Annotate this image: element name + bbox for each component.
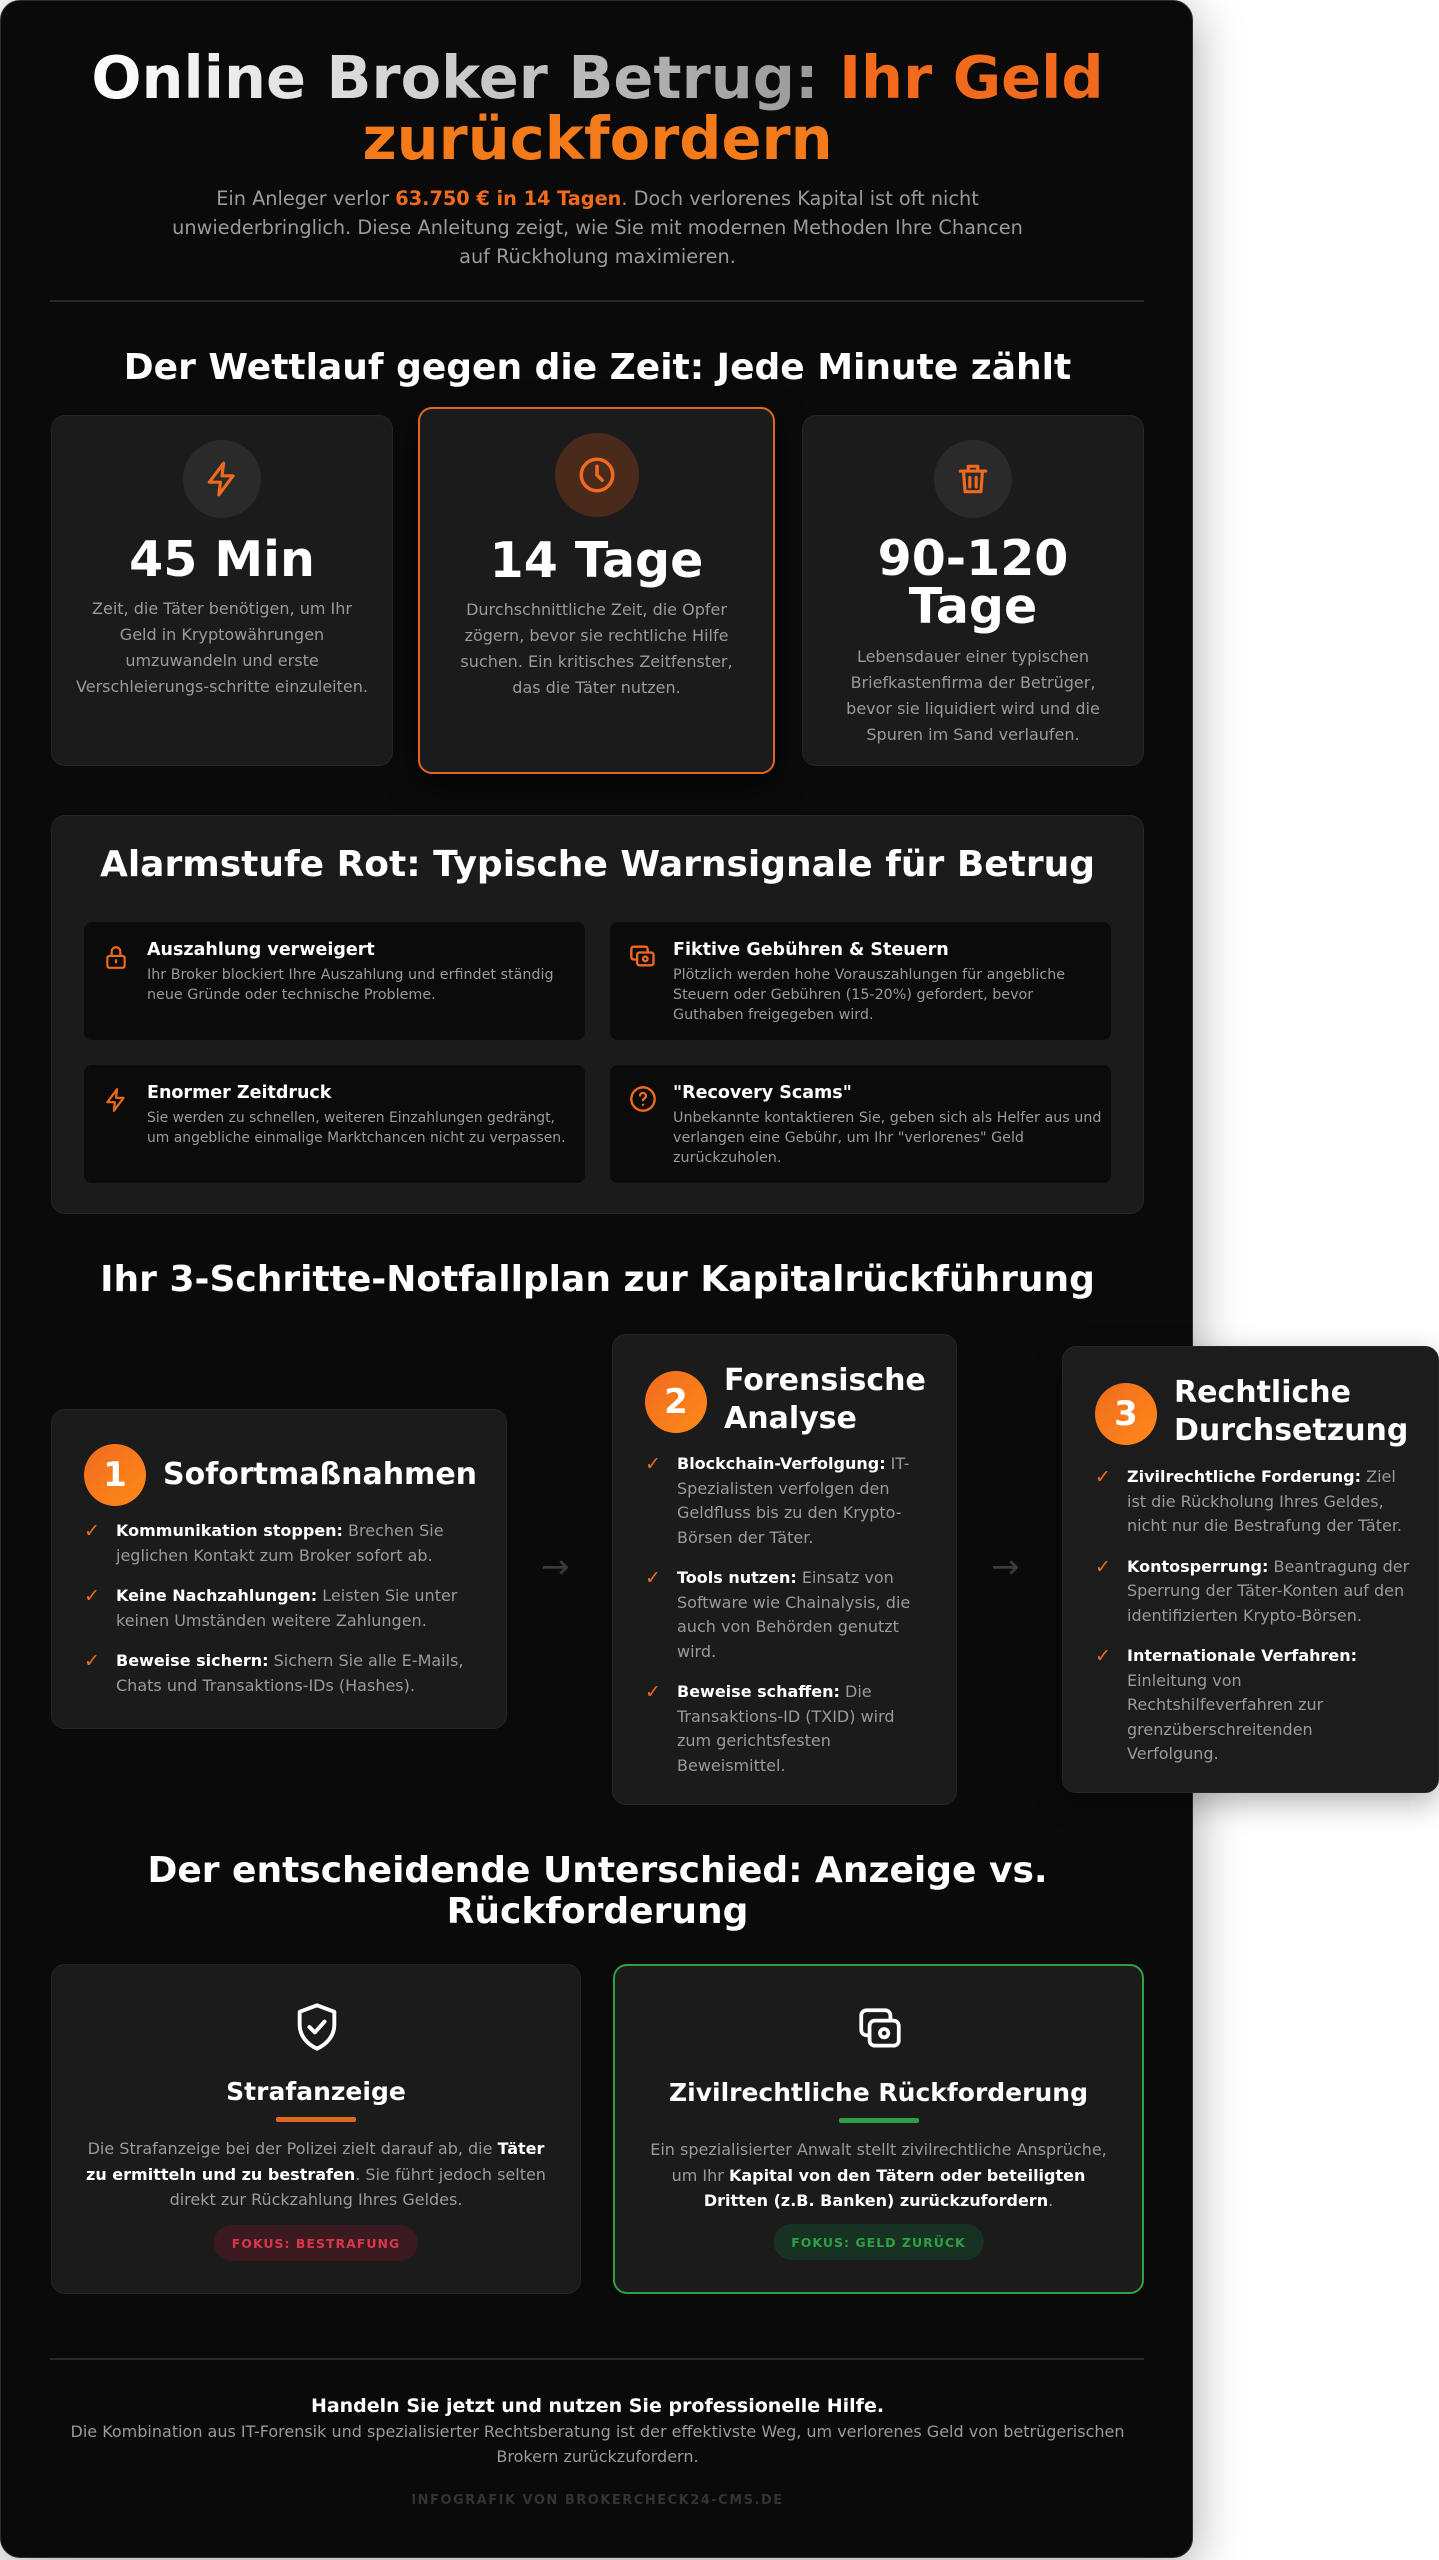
step 3 card: Internationale Verfahren: Einleitung von Rechtshilfeverfahren zur grenzüberschreitenden Verfolgung. <box>1127 1646 1357 1763</box>
heading: 3-step plan: Ihr 3-Schritte-Notfallplan zur Kapitalrückführung <box>100 1259 1095 1300</box>
footer credit: INFOGRAFIK VON BROKERCHECK24-CMS.DE <box>411 2493 784 2508</box>
warning: recovery scams: Unbekannte kontaktieren Sie, geben sich als Helfer aus und verlangen eine Gebühr, um Ihr "verlorenes" Geld zurückzuholen. <box>673 1110 1102 1166</box>
warning: payout refused: Auszahlung verweigert <box>147 940 375 960</box>
step 2 card: Blockchain-Verfolgung: IT-Spezialisten verfolgen den Geldfluss bis zu den Krypto-Börsen der Täter. <box>677 1454 909 1546</box>
step 1 card: Sofortmaßnahmen <box>163 1457 477 1492</box>
step 2 card: Analyse <box>724 1401 857 1436</box>
stat card: 90-120 Tage <box>802 415 1144 766</box>
heading: race against time: Der Wettlauf gegen die Zeit: Jede Minute zählt <box>124 347 1071 388</box>
stat card: 14 Tage (highlight) <box>418 407 775 774</box>
subtitle: Ein Anleger verlor 63.750 € in 14 Tagen. Doch verlorenes Kapital ist oft nicht unwiederbringlich. Diese Anleitung zeigt, wie Sie mit modernen Methoden Ihre Chancen auf Rückholung maximieren. <box>172 187 1023 268</box>
compare card: Rückforderung <box>613 1964 1144 2294</box>
step 1 card: Beweise sichern: Sichern Sie alle E-Mails, Chats und Transaktions-IDs (Hashes). <box>116 1651 463 1694</box>
warning: fees <box>610 922 1111 1040</box>
stat card: 90-120 Tage: Lebensdauer einer typischen Briefkastenfirma der Betrüger, bevor sie liquidiert wird und die Spuren im Sand verlaufen. <box>846 647 1100 744</box>
title: Online Broker Betrug: Ihr Geld <box>91 43 1104 112</box>
warning: recovery scams <box>610 1065 1111 1183</box>
warning: time pressure: Sie werden zu schnellen, weiteren Einzahlungen gedrängt, um angebliche einmalige Marktchancen nicht zu verpassen. <box>147 1110 566 1146</box>
panel: warning signals <box>51 815 1144 1214</box>
icon: trash <box>934 440 1012 518</box>
title: zurückfordern <box>362 104 833 173</box>
warning: payout refused <box>84 922 585 1040</box>
arrow 2: → <box>991 1547 1020 1587</box>
step 2 card: 2 <box>664 1382 688 1422</box>
stat card: 45 Min: 45 Min <box>129 531 315 588</box>
compare card: Strafanzeige <box>51 1964 581 2294</box>
step 1 card <box>51 1409 507 1729</box>
warning: time pressure: Enormer Zeitdruck <box>147 1083 331 1103</box>
warning: payout refused: Ihr Broker blockiert Ihre Auszahlung und erfindet ständig neue Gründe oder technische Probleme. <box>147 967 554 1003</box>
step 3 card: Rechtliche <box>1174 1375 1351 1410</box>
step 1 card: 1 <box>103 1455 127 1495</box>
step 3 card: Durchsetzung <box>1174 1413 1408 1448</box>
compare card: Strafanzeige: Die Strafanzeige bei der Polizei zielt darauf ab, die Täter zu ermitteln und zu bestrafen. Sie führt jedoch selten direkt zur Rückzahlung Ihres Geldes. <box>86 2139 546 2209</box>
step 3 card: Zivilrechtliche Forderung: Ziel ist die Rückholung Ihres Geldes, nicht nur die Bestrafung der Täter. <box>1127 1467 1402 1535</box>
step 1 card: Keine Nachzahlungen: Leisten Sie unter keinen Umständen weitere Zahlungen. <box>116 1586 457 1630</box>
step 1 card: Kommunikation stoppen: Brechen Sie jeglichen Kontakt zum Broker sofort ab. <box>116 1521 444 1564</box>
compare card: Rückforderung: Zivilrechtliche Rückforderung <box>669 2078 1088 2107</box>
arrow 1: → <box>541 1547 570 1587</box>
title <box>91 43 1104 173</box>
stat card: 14 Tage (highlight): Durchschnittliche Zeit, die Opfer zögern, bevor sie rechtliche Hilfe suchen. Ein kritisches Zeitfenster, das die Täter nutzen. <box>460 600 733 697</box>
footer text: Die Kombination aus IT-Forensik und spezialisierter Rechtsberatung ist der effektivste Weg, um verlorenes Geld von betrügerischen Brokern zurückzufordern. <box>70 2422 1124 2466</box>
stat card: 90-120 Tage: Tage <box>909 578 1037 635</box>
warning: recovery scams: "Recovery Scams" <box>673 1083 852 1103</box>
stat card: 45 Min: Zeit, die Täter benötigen, um Ihr Geld in Kryptowährungen umzuwandeln und erste Verschleierungs-schritte einzuleiten. <box>76 599 368 696</box>
footer text <box>70 2395 1124 2466</box>
footer text: Handeln Sie jetzt und nutzen Sie professionelle Hilfe. <box>311 2395 884 2417</box>
compare card: Strafanzeige: FOKUS: BESTRAFUNG <box>232 2236 400 2250</box>
warning: fees: Plötzlich werden hohe Vorauszahlungen für angebliche Steuern oder Gebühren (15-20%) gefordert, bevor Guthaben freigegeben wird. <box>673 967 1065 1023</box>
step 3 card: Kontosperrung: Beantragung der Sperrung der Täter-Konten auf den identifizierten Krypto-Börsen. <box>1127 1556 1409 1624</box>
step 2 card: Forensische <box>724 1363 926 1398</box>
stat card: 45 Min <box>51 415 393 766</box>
stat card: 90-120 Tage: 90-120 <box>878 530 1068 587</box>
icon: lightning <box>183 440 261 518</box>
icon: shield <box>298 2003 336 2051</box>
heading: Alarmstufe Rot: Typische Warnsignale für Betrug <box>100 844 1095 885</box>
compare card: Strafanzeige: Strafanzeige <box>226 2077 406 2106</box>
step 2 card: Beweise schaffen: Die Transaktions-ID (TXID) wird zum gerichtsfesten Beweismittel. <box>677 1682 895 1774</box>
compare card: Rückforderung: Ein spezialisierter Anwalt stellt zivilrechtliche Ansprüche, um Ihr Kapital von den Tätern oder beteiligten Dritten (z.B. Banken) zurückzufordern. <box>650 2140 1107 2210</box>
icon: money <box>859 2008 901 2048</box>
icon: clock <box>554 433 638 517</box>
heading: difference: Der entscheidende Unterschied: Anzeige vs. Rückforderung <box>147 1850 1048 1932</box>
step 3 card <box>1062 1346 1439 1793</box>
step 2 card: Tools nutzen: Einsatz von Software wie Chainalysis, die auch von Behörden genutzt wird. <box>677 1568 910 1660</box>
step 3 card: 3 <box>1114 1394 1138 1434</box>
step 2 card <box>612 1334 957 1805</box>
warning: fees: Fiktive Gebühren & Steuern <box>673 940 949 960</box>
stat card: 14 Tage (highlight): 14 Tage <box>490 532 703 589</box>
compare card: Rückforderung: FOKUS: GELD ZURÜCK <box>791 2234 966 2250</box>
warning: time pressure <box>84 1065 585 1183</box>
